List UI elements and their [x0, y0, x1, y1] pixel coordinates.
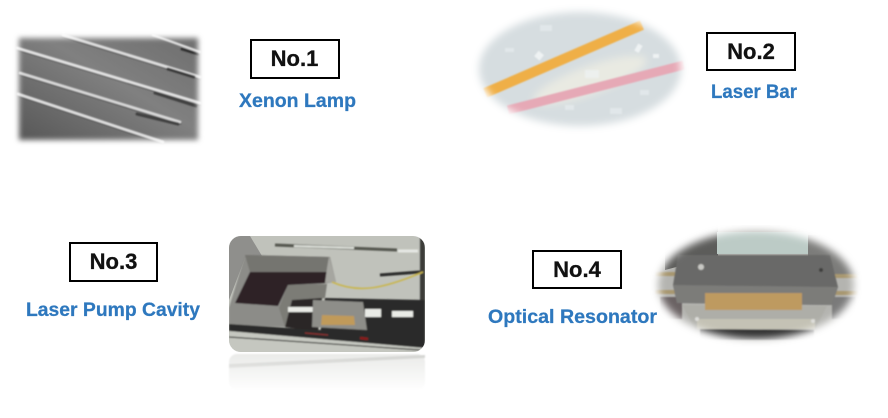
label: Xenon Lamp: Xenon Lamp — [239, 90, 356, 112]
label: Laser Pump Cavity: Laser Pump Cavity — [26, 299, 200, 321]
badge: No.4 — [533, 251, 621, 288]
label: Optical Resonator: Optical Resonator — [488, 306, 657, 328]
label: Laser Bar: Laser Bar — [711, 81, 797, 103]
badge: No.3: No.3 — [90, 249, 137, 274]
badge: No.2: No.2 — [727, 39, 775, 64]
panel: no.1 xenon lamp photo — [14, 34, 202, 144]
badge: No.2 — [707, 33, 795, 70]
badge: No.1 — [251, 40, 339, 78]
badge: No.3 — [70, 243, 157, 281]
badge: No.1: No.1 — [271, 46, 318, 71]
panel: no.2 laser bar photo — [476, 9, 685, 129]
reflection — [228, 353, 426, 391]
panel: no.3 laser pump cavity photo — [228, 236, 426, 391]
panel: no.4 optical resonator photo — [650, 225, 862, 347]
badge: No.4: No.4 — [553, 257, 602, 282]
